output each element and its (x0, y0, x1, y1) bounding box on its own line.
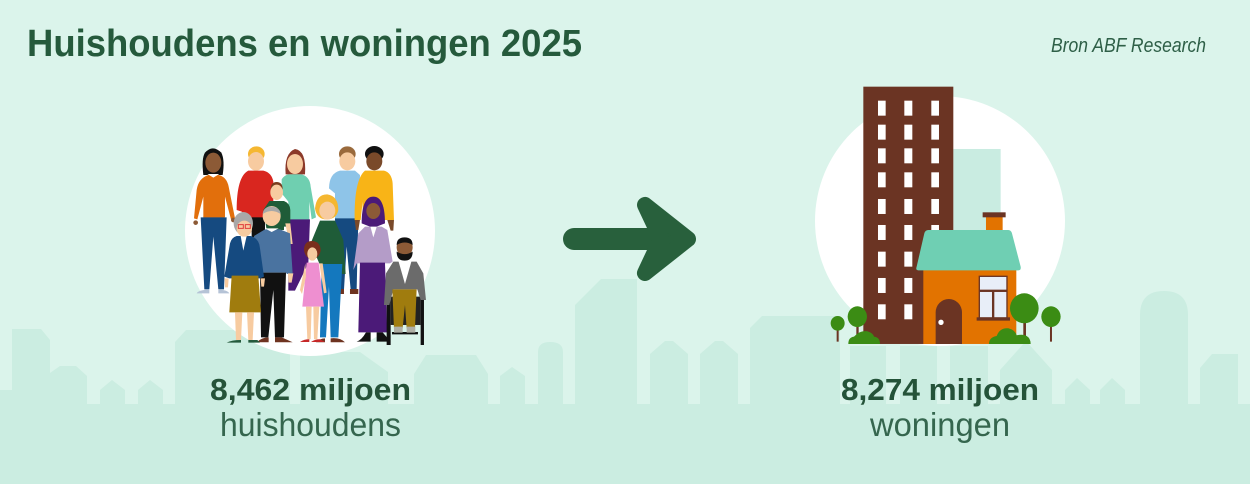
person: woman with hijab (353, 197, 393, 342)
statistic: households (210, 372, 411, 443)
person: grandmother with glasses (224, 212, 265, 343)
title: Huishoudens en woningen 2025 (27, 23, 582, 65)
person: man in blue sweater (254, 206, 293, 342)
white circle: dwellings (815, 96, 1065, 346)
person: girl in pink dress (300, 241, 327, 342)
skyline background (0, 279, 1250, 484)
person: woman in green sweater and jeans (311, 194, 346, 342)
person: man in yellow sweater (355, 146, 394, 231)
house (916, 230, 1021, 344)
white circle: households (185, 106, 435, 356)
person: woman in orange sweater (193, 148, 236, 293)
icon: group of people (193, 146, 426, 345)
person: boy in green shirt (263, 182, 293, 244)
person: man in red sweater (237, 146, 273, 237)
pale background tower (953, 149, 1001, 232)
person: woman in teal sweater (282, 149, 316, 291)
chimney (983, 212, 1006, 231)
statistic: households: huishoudens (220, 406, 401, 443)
statistic: households: 8,462 miljoen (210, 372, 411, 407)
person: man in light blue sweater (329, 146, 360, 294)
person: man in wheelchair (384, 237, 426, 345)
arrow (563, 205, 688, 273)
icon: apartment tower and house (831, 87, 1061, 344)
source note: Bron ABF Research (1051, 35, 1206, 57)
trees and bushes (831, 293, 1061, 344)
statistic: dwellings: woningen (869, 406, 1010, 443)
apartment tower (863, 87, 953, 344)
statistic: dwellings (841, 372, 1039, 443)
statistic: dwellings: 8,274 miljoen (841, 372, 1039, 407)
